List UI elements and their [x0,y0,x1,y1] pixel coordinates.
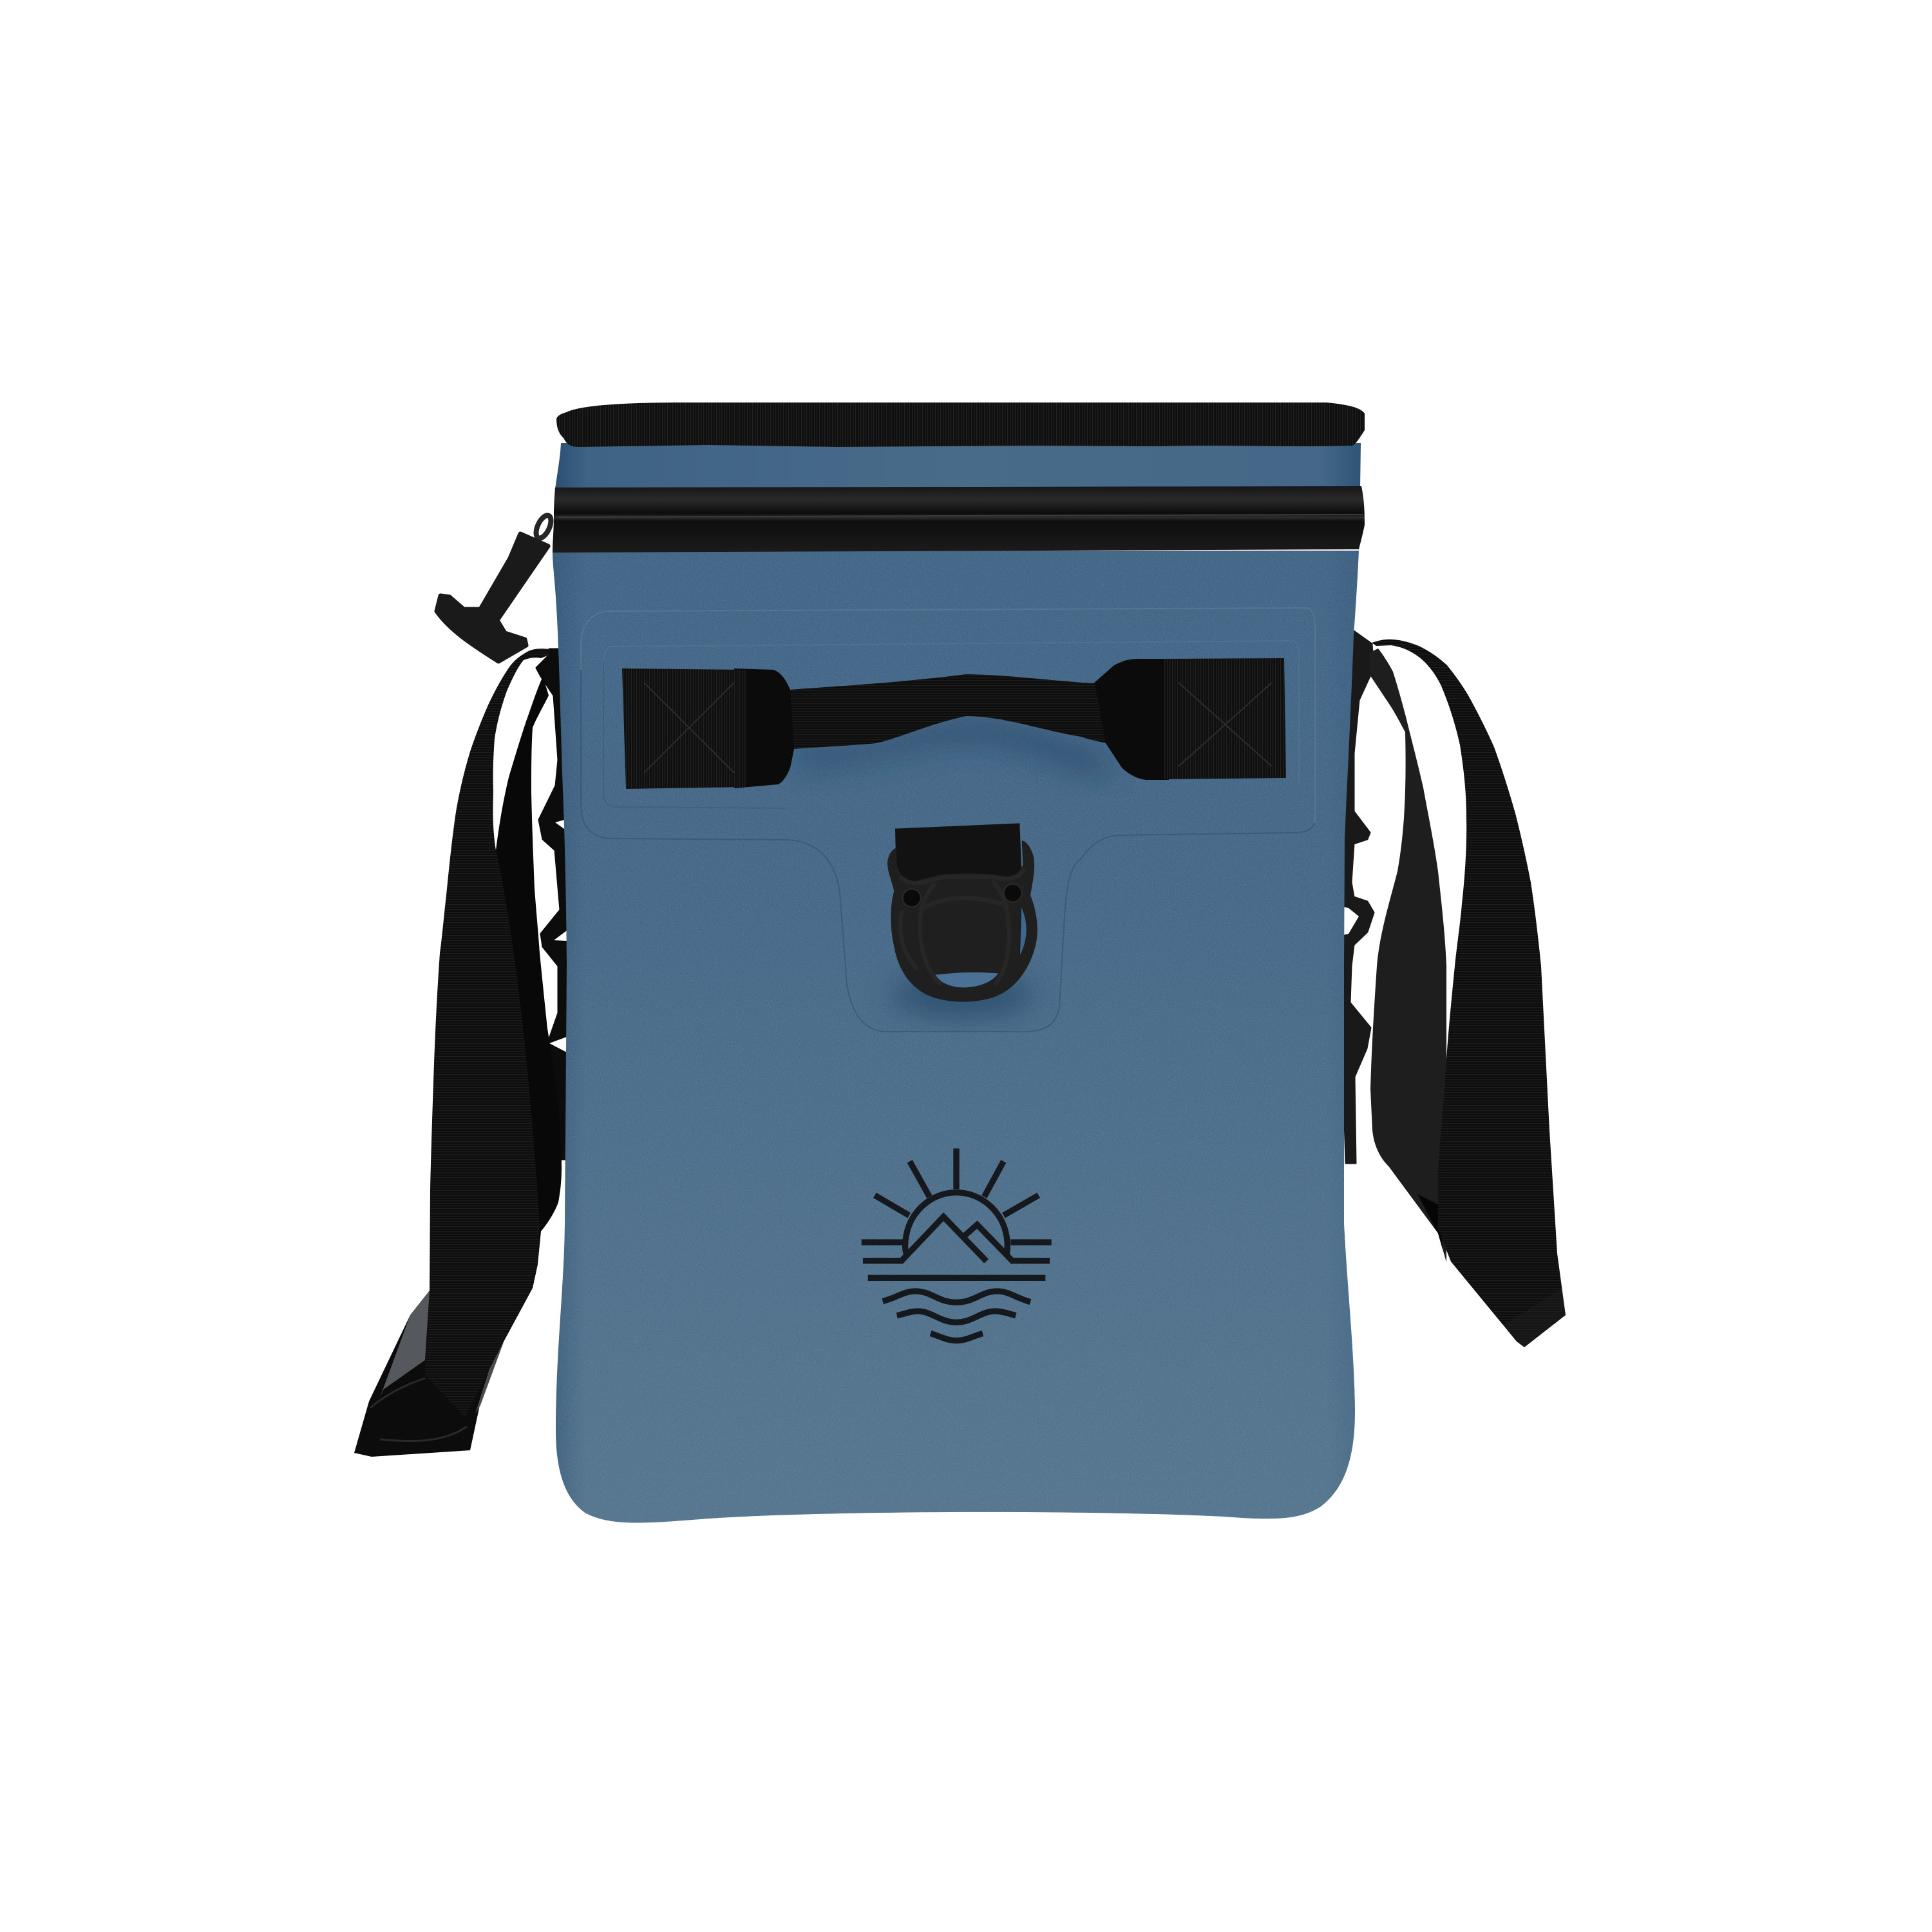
seam panel outlines [581,661,1315,1032]
handle webbing strap [773,659,1147,784]
zipper seal line [558,515,1363,517]
logo mountains [863,1217,1050,1261]
logo: sun, mountains and waves [862,1148,1052,1341]
left handle fold [734,668,794,788]
right strap [1370,639,1566,1347]
left loop openings [549,819,567,1052]
D-ring frame [887,840,1037,1002]
right strap outer strand [1372,639,1566,1347]
logo waves [883,1291,1030,1302]
D-ring shadow [892,972,1034,1018]
zipper ring [533,513,554,540]
logo water line [868,1269,1045,1287]
top black binding [556,402,1365,447]
carry handle [622,658,1286,789]
strap fold [354,1291,502,1457]
strap fold grey lining right [475,1342,504,1414]
D-ring blue side opening [1020,907,1027,954]
right handle patch [1164,658,1286,779]
right strap inner strand [1370,649,1446,1262]
left side webbing with loops [536,649,573,1159]
right strap shadow wedge [1417,1194,1443,1249]
faint upper panel seams [581,608,1315,823]
right side webbing with loops [1336,631,1374,1163]
zipper band [553,486,1365,553]
D-ring tie-down loop [887,823,1037,1002]
logo horizon lines [862,1233,1052,1251]
upper blue band [555,443,1361,489]
D-ring rivet holes [903,889,921,907]
bag body [553,551,1359,1523]
strap fold crease [370,1378,467,1441]
left strap front strand [425,649,549,1417]
left handle patch [622,668,747,789]
D-ring fabric tab [895,823,1022,974]
box-x stitches [644,683,1272,773]
right handle fold [1095,659,1169,780]
D-ring inner bars [900,869,1024,983]
logo rays [875,1148,1039,1215]
handle shadow [799,721,1108,779]
strap fold grey lining [380,1291,430,1397]
logo sun arc [905,1193,1007,1254]
left strap back strand [451,676,562,1344]
right loop opening [1343,907,1359,935]
right strap end [1504,1288,1566,1347]
left strap [354,649,562,1457]
zipper T-grip [437,534,548,661]
D-ring blue bottom opening [934,972,998,987]
zipper pull [437,513,554,661]
